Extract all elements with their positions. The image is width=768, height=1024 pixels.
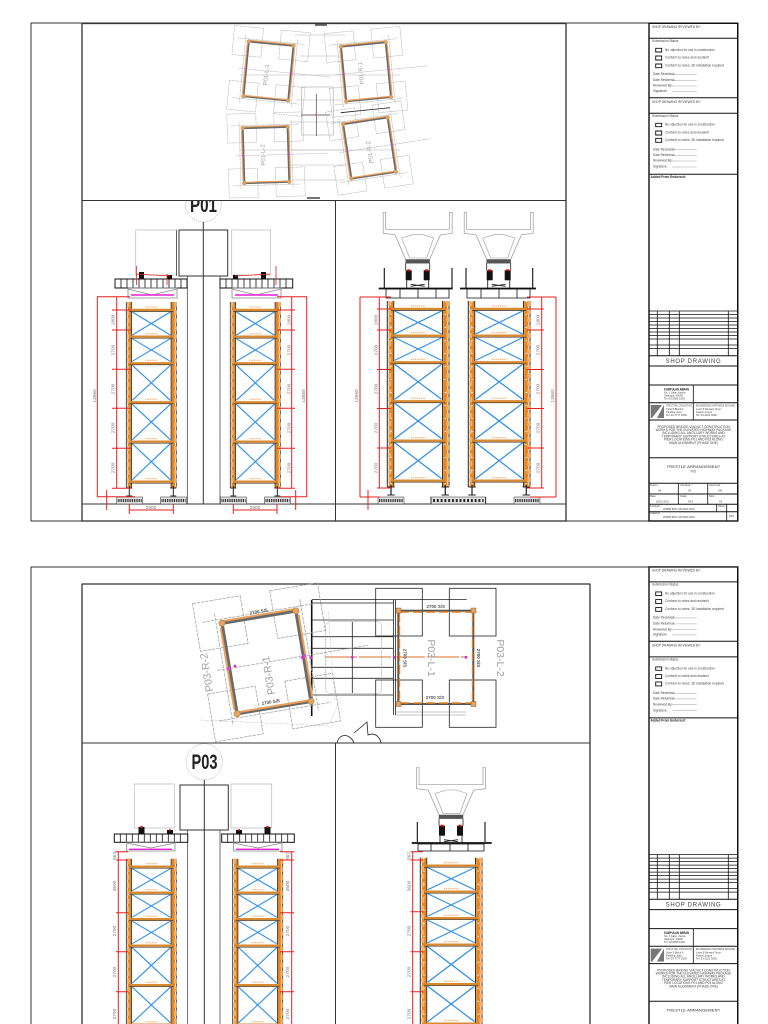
dimensions: 2700 <box>406 1008 412 1019</box>
shop drawing review text: Conform to notes, 3D installation required <box>665 138 724 142</box>
dimensions right: 2700 <box>285 966 291 977</box>
drawing data: AM <box>718 488 722 492</box>
dimensions right: 13560 <box>550 389 556 403</box>
girder sections <box>383 212 533 288</box>
dimensions left: 567 <box>112 852 118 860</box>
dimensions right: 2700 <box>536 344 542 355</box>
dimensions left: 2700 <box>110 422 116 433</box>
pier <box>180 780 228 1024</box>
contractor details: Petaling Jaya <box>666 954 682 958</box>
drawing data: Date: <box>650 494 656 498</box>
contractor details: Tel: 03-7777 2000 <box>666 413 687 417</box>
trestle tower elevation <box>420 858 482 1024</box>
pier label P03 <box>186 744 222 780</box>
top platforms <box>379 268 536 298</box>
contractor details: STRUCTURAL CONSULTANTS <box>666 404 692 408</box>
dimensions left: 2700 <box>374 462 380 473</box>
dimensions left <box>354 297 391 510</box>
dimensions right: 3600 <box>285 880 291 891</box>
dimensions left: 2700 <box>374 344 380 355</box>
dimensions right: 13560 <box>301 389 307 403</box>
shop drawing review text: Submission Status <box>652 658 679 662</box>
sheet 2 frame and panel grid <box>31 567 738 1024</box>
pier label P01: P01 <box>190 195 217 217</box>
dimensions left: 2700 <box>112 966 118 977</box>
trestle tower elevation left <box>387 301 449 495</box>
shop drawing review text: Signature: <box>653 633 668 637</box>
contractor details: Tel: 03-2222 3000 <box>696 413 717 417</box>
drawing data: SK <box>688 488 692 492</box>
shop drawing stamp: SHOP DRAWING <box>666 359 721 365</box>
trestle plan P03-R: P03-R-1 <box>260 655 278 696</box>
trestle plan P03-L: 2700 S/S <box>426 604 445 609</box>
drawing data: R01 <box>729 514 734 518</box>
trestle plan P01-L-2 <box>227 111 329 198</box>
shop drawing review text: Date Received: <box>653 616 675 620</box>
project title: INCLUDING ALL ANCILLARY WORKS AND <box>662 431 725 435</box>
dimensions <box>406 852 423 1024</box>
pier <box>176 222 228 504</box>
contractor details: ENGINEERING PARTNERS SDN BHD <box>696 947 735 951</box>
drawing title: TRESTLE ARRANGEMENT <box>667 464 721 469</box>
dimensions: 2700 <box>406 925 412 936</box>
dimensions right: 1800 <box>536 314 542 325</box>
dimensions left: 2500 <box>146 505 157 511</box>
dimensions right: 2700 <box>286 462 292 473</box>
contractor details: KUMPULAN ABRAN <box>664 931 690 935</box>
contractor details: STRUCTURAL CONSULTANTS <box>666 947 692 951</box>
drawing data: NTS <box>688 500 693 504</box>
contractor details: Suite 5 Block A <box>666 407 684 411</box>
trestle plan P03-L: P03-L-1 <box>425 639 437 677</box>
drawing data: WSMB-BCK-SD-0003-0001 <box>663 515 696 519</box>
drawing data: Scale: <box>680 494 687 498</box>
trestle plan P03-L: 2700 S/S <box>426 695 444 700</box>
dimensions: 3600 <box>406 880 412 891</box>
trestle plan P01-R-1 <box>324 24 432 117</box>
shop drawing review text: Signature: <box>653 165 668 169</box>
footings <box>117 497 290 504</box>
shop drawing stamp: SHOP DRAWING <box>666 903 721 909</box>
trestle plan P03-L: 2700 S/S <box>402 649 408 667</box>
drawing title <box>667 464 721 474</box>
contractor details: Petaling Jaya <box>666 410 682 414</box>
trestle plan P01-L-1 <box>227 26 334 119</box>
project title: TEMPORARY SUPPORT STRUCTURES AT <box>662 434 725 438</box>
project title: WORKS FOR THE ELEVATED HIGHWAY PACKAGE <box>656 428 731 432</box>
footings <box>378 497 540 504</box>
drawing data: Checked: <box>680 483 691 487</box>
shop drawing review text: SHOP DRAWING REVIEWED BY: <box>652 569 701 573</box>
contractor details: Level 8 Menara Timur <box>696 407 721 411</box>
shop drawing review text: SHOP DRAWING REVIEWED BY: <box>652 100 701 104</box>
contractor details: Level 8 Menara Timur <box>696 951 721 955</box>
shop drawing review text: Reviewed By: <box>653 702 673 706</box>
dimensions right: 2500 <box>250 505 261 511</box>
trestle plan P03-R <box>192 576 380 742</box>
project title: PIER LOCATIONS P01 AND P03 ALONG <box>664 981 723 985</box>
contractor details: Tel: 03-5555 1000 <box>664 940 685 944</box>
dimensions left: 13560 <box>92 389 98 403</box>
dimensions left <box>92 297 173 514</box>
contractor details: Tel: 03-7777 2000 <box>666 957 687 961</box>
girders <box>136 230 271 275</box>
girder section <box>416 768 486 844</box>
shop drawing review text: Signature: <box>653 708 668 712</box>
drawing data: 18.03.2021 <box>656 500 670 504</box>
contractor details <box>664 931 735 961</box>
shop drawing review text: Reviewed By: <box>653 159 673 163</box>
dimensions left: 2700 <box>112 925 118 936</box>
dimensions left: 2700 <box>110 383 116 394</box>
sheet 1 frame and panel grid <box>31 23 738 521</box>
trestle tower right <box>233 859 283 1024</box>
sheet 1 <box>31 23 738 521</box>
drawing title: P01 <box>691 470 697 474</box>
shop drawing review text: Date Returned: <box>653 78 675 82</box>
contractor details: ENGINEERING PARTNERS SDN BHD <box>696 404 735 408</box>
dimensions right <box>233 297 307 514</box>
contractor details: Selangor, 40000 <box>664 937 683 941</box>
shop drawing review text: Conform to notes, 3D installation required <box>665 607 724 611</box>
dimensions right: 2700 <box>536 383 542 394</box>
trestle plan P01-R-2 <box>326 97 437 195</box>
title block grid <box>649 567 738 1024</box>
shop drawing review text: Date Received: <box>653 147 675 151</box>
dimensions right: 2700 <box>286 383 292 394</box>
dimensions right: 2700 <box>285 925 291 936</box>
drawing data: AK <box>658 488 662 492</box>
shop drawing review text: Added From Endorsed: <box>650 719 686 723</box>
contractor details: Suite 5 Block A <box>666 951 684 955</box>
project title <box>656 425 731 445</box>
tie point markers <box>234 656 467 667</box>
dimensions left: 2700 <box>374 422 380 433</box>
trestle tower right <box>230 302 280 496</box>
dimensions right: 2700 <box>286 422 292 433</box>
shop drawing review text: No objection for use in construction <box>665 123 715 127</box>
pier label P01 <box>185 201 222 222</box>
dimensions right <box>280 852 294 1024</box>
title block grid <box>649 23 738 521</box>
trestle plan P01-R-2: P01-R-2 <box>366 140 375 164</box>
shop drawing review text: Conform to notes, 3D installation required <box>665 64 724 68</box>
drawing data: WSMB-BCK-SD-0003-0001 <box>663 507 696 511</box>
shop drawing review text: Conform to notes and resubmit <box>665 130 709 134</box>
dimensions left: 2700 <box>110 344 116 355</box>
pier label P03: P03 <box>192 751 218 774</box>
contractor details: No. 1 Jalan Utama <box>664 934 686 938</box>
dimensions left: 2700 <box>110 462 116 473</box>
shop drawing review text: Reviewed By: <box>653 627 673 631</box>
drawing data: A3 <box>719 500 723 504</box>
shop drawing review text: Conform to notes and resubmit <box>665 56 709 60</box>
shop drawing review text: No objection for use in construction <box>665 592 715 596</box>
contractor details: Kuala Lumpur <box>696 410 712 414</box>
shop drawing review text: Conform to notes and resubmit <box>665 674 709 678</box>
project title: INCLUDING ALL ANCILLARY WORKS AND <box>662 975 725 979</box>
drawing data <box>650 483 734 519</box>
drawing data: Sheet <box>718 504 725 508</box>
shop drawing review text <box>650 25 724 179</box>
front elevation P03 <box>112 744 294 1024</box>
drawing title: TRESTLE ARRANGEMENT <box>667 1008 721 1013</box>
dimensions right: 2700 <box>536 422 542 433</box>
shop drawing review text: Date Returned: <box>653 697 675 701</box>
contractor details <box>664 388 735 417</box>
shop drawing review text: Submission Status <box>652 583 679 587</box>
consultant logo <box>651 405 664 418</box>
trestle plan P03-L <box>376 588 506 727</box>
shop drawing review text: Date Returned: <box>653 622 675 626</box>
plan view P01 <box>227 24 437 198</box>
consultant logo <box>651 949 664 962</box>
title block sheet 1 <box>649 23 738 521</box>
break line <box>337 722 381 743</box>
trestle tower elevation right <box>468 301 530 495</box>
plan view P03 <box>192 576 506 743</box>
trestle plan P03-L: P03-L-2 <box>494 639 506 677</box>
dimensions right: 567 <box>285 852 291 860</box>
shop drawing review text: SHOP DRAWING REVIEWED BY: <box>652 25 701 29</box>
contractor details: KUMPULAN ABRAN <box>664 388 690 392</box>
shop drawing review text: Conform to notes and resubmit <box>665 599 709 603</box>
dimensions right: 2700 <box>286 344 292 355</box>
drawing data: Contract: <box>650 504 661 508</box>
trestle plan P03-R: P03-R-2 <box>198 652 216 693</box>
sheet 2 <box>31 567 738 1024</box>
trestle plan P01-L-1: P01-L-1 <box>263 63 271 86</box>
centre pier plan <box>200 600 467 726</box>
project title <box>656 969 731 989</box>
dimensions left: 3600 <box>112 880 118 891</box>
dimensions left: 2700 <box>112 1008 118 1019</box>
trestle tower left <box>126 859 176 1024</box>
project title: MAIN ALIGNMENT (PHASE ONE) <box>669 441 718 445</box>
trestle plan P03-R: 2700 S/S <box>249 608 268 616</box>
project title: PROPOSED BRIDGE VIADUCT CONSTRUCTION <box>657 969 730 973</box>
project title: PROPOSED BRIDGE VIADUCT CONSTRUCTION <box>657 425 730 429</box>
dimensions left: 1800 <box>374 314 380 325</box>
shop drawing review text <box>650 569 724 723</box>
contractor details: Selangor, 40000 <box>664 394 683 398</box>
contractor details: Tel: 03-5555 1000 <box>664 396 685 400</box>
drawing data: Drawn: <box>650 483 658 487</box>
shop drawing review text: Submission Status <box>652 114 679 118</box>
top platform <box>412 822 492 851</box>
deck beams and bearings <box>115 266 293 298</box>
drawing data: Size: <box>709 494 715 498</box>
side elevation P03 <box>406 768 492 1024</box>
contractor details: No. 1 Jalan Utama <box>664 390 686 394</box>
shop drawing review text: Date Received: <box>653 72 675 76</box>
drawing data: Approved: <box>709 483 721 487</box>
shop drawing review text: No objection for use in construction <box>665 666 715 670</box>
project title: WORKS FOR THE ELEVATED HIGHWAY PACKAGE <box>656 972 731 976</box>
shop drawing review text: Reviewed By: <box>653 84 673 88</box>
title block sheet 2 <box>649 567 738 1024</box>
deck beams and bearings <box>114 826 294 851</box>
dimensions left: 2700 <box>374 383 380 394</box>
shop drawing review text: Signature: <box>653 89 668 93</box>
dimensions right: 2700 <box>536 462 542 473</box>
shop drawing review text: Submission Status <box>652 39 679 43</box>
dimensions left: 13560 <box>354 389 360 403</box>
contractor details: Tel: 03-2222 3000 <box>696 957 717 961</box>
dimensions right: 2700 <box>285 1008 291 1019</box>
centre pier plan <box>240 25 400 198</box>
girders <box>134 784 272 828</box>
dimensions left <box>112 852 128 1024</box>
front elevation P01 <box>92 186 307 514</box>
shop drawing review text: Conform to notes, 3D installation required <box>665 682 724 686</box>
contractor details: Kuala Lumpur <box>696 954 712 958</box>
trestle plan P03-L: 2700 S/S <box>476 649 481 667</box>
trestle plan P01-L-2: P01-L-2 <box>261 144 267 166</box>
drawing data: Drawing: <box>650 511 661 515</box>
dimensions: 2700 <box>406 966 412 977</box>
project title: TEMPORARY SUPPORT STRUCTURES AT <box>662 978 725 982</box>
shop drawing review text: No objection for use in construction <box>665 48 715 52</box>
shop drawing review text: SHOP DRAWING REVIEWED BY: <box>652 644 701 648</box>
dimensions left: 1800 <box>110 314 116 325</box>
shop drawing review text: Added From Endorsed: <box>650 175 686 179</box>
trestle tower left <box>126 302 176 496</box>
trestle plan P03-R: 2700 S/S <box>261 698 280 706</box>
project title: MAIN ALIGNMENT (PHASE ONE) <box>669 985 718 989</box>
shop drawing review text: Date Received: <box>653 691 675 695</box>
side elevation P01 <box>354 212 556 510</box>
dimensions right: 1800 <box>286 314 292 325</box>
dimensions right <box>527 297 556 497</box>
trestle plan P01-R-1: P01-R-1 <box>358 61 366 85</box>
dimensions: 567 <box>406 852 412 860</box>
shop drawing review text: Date Returned: <box>653 153 675 157</box>
project title: PIER LOCATIONS P01 AND P03 ALONG <box>664 438 723 442</box>
